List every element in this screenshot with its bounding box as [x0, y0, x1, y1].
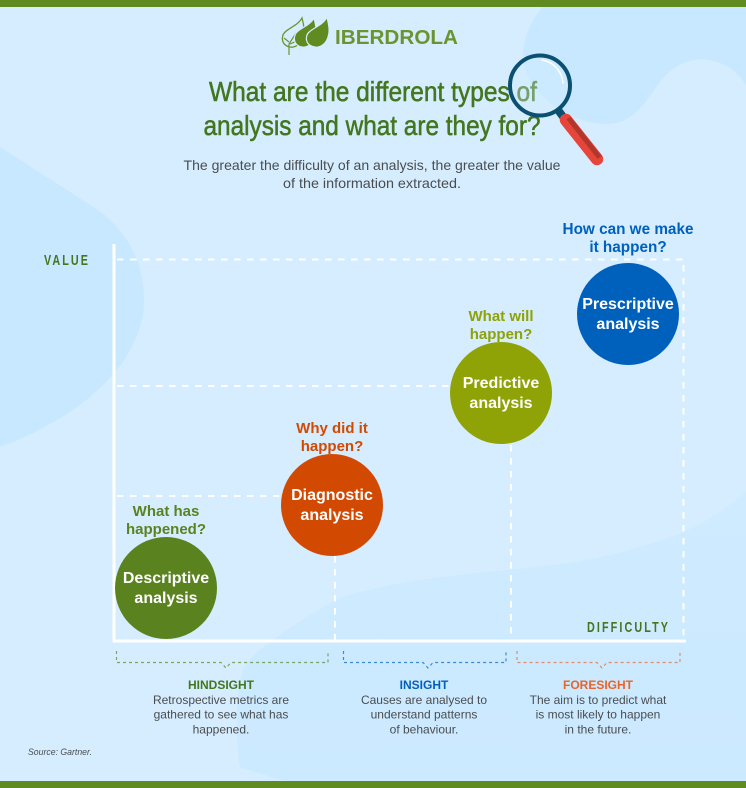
text block: insight: Causes are analysed to [361, 693, 487, 707]
logo wordmark: IBERDROLA [335, 27, 458, 49]
text block: insight: of behaviour. [390, 722, 458, 736]
bubble: diagnostic: Diagnostic [291, 487, 373, 504]
bracket: hindsight [116, 651, 328, 668]
grid lines [117, 260, 684, 640]
text block: hindsight: gathered to see what has [154, 708, 288, 722]
question: what will happen: happen? [470, 326, 532, 343]
top green bar [0, 0, 746, 7]
bracket: insight [344, 651, 506, 668]
text block: insight: INSIGHT [400, 678, 449, 692]
subtitle: The greater the difficulty of an analysis, the greater the value [184, 157, 561, 173]
bubble: prescriptive: analysis [596, 316, 660, 333]
bubble: descriptive: Descriptive [123, 570, 209, 587]
question: how can we make it happen: How can we make [563, 221, 693, 238]
text block: insight: understand patterns [371, 708, 477, 722]
text block: foresight: The aim is to predict what [530, 693, 667, 707]
title: What are the different types of [209, 76, 537, 107]
question: how can we make it happen: it happen? [589, 239, 667, 256]
source note: Source: Gartner. [28, 747, 92, 757]
bubble: predictive: Predictive [463, 375, 539, 392]
text block: foresight: is most likely to happen [536, 708, 660, 722]
bubble: prescriptive: Prescriptive [582, 296, 674, 313]
chart: value vs difficulty [44, 221, 693, 641]
question: why did it happen: happen? [301, 438, 363, 455]
bubble: descriptive [115, 537, 217, 639]
bottom green bar [0, 781, 746, 788]
x axis label: DIFFICULTY [587, 618, 668, 635]
text block: hindsight: happened. [193, 722, 249, 736]
text block: hindsight: Retrospective metrics are [153, 693, 289, 707]
question: what will happen: What will [468, 308, 534, 325]
bracket: foresight [517, 651, 680, 668]
text block: insight [361, 678, 487, 736]
bubble: diagnostic [281, 454, 383, 556]
y axis label: VALUE [44, 251, 88, 268]
text block: foresight [530, 678, 667, 736]
bubble: descriptive: analysis [134, 590, 198, 607]
text block: hindsight [153, 678, 289, 736]
question: what has happened: What has [133, 503, 199, 520]
subtitle: of the information extracted. [283, 175, 461, 191]
bubble: predictive: analysis [469, 395, 533, 412]
bubble: diagnostic: analysis [300, 507, 364, 524]
text block: foresight: FORESIGHT [563, 678, 634, 692]
text block: hindsight: HINDSIGHT [188, 678, 255, 692]
axes [114, 244, 686, 641]
question: why did it happen: Why did it [296, 420, 368, 437]
question: what has happened: happened? [126, 521, 206, 538]
logo: Iberdrola [282, 17, 458, 55]
text block: foresight: in the future. [565, 722, 631, 736]
title [204, 76, 540, 141]
icon: leaves [282, 17, 329, 55]
bubble: prescriptive [577, 263, 679, 365]
icon: magnifying glass [510, 56, 600, 159]
subtitle [184, 157, 561, 191]
bubble: predictive [450, 342, 552, 444]
title: analysis and what are they for? [204, 110, 540, 141]
